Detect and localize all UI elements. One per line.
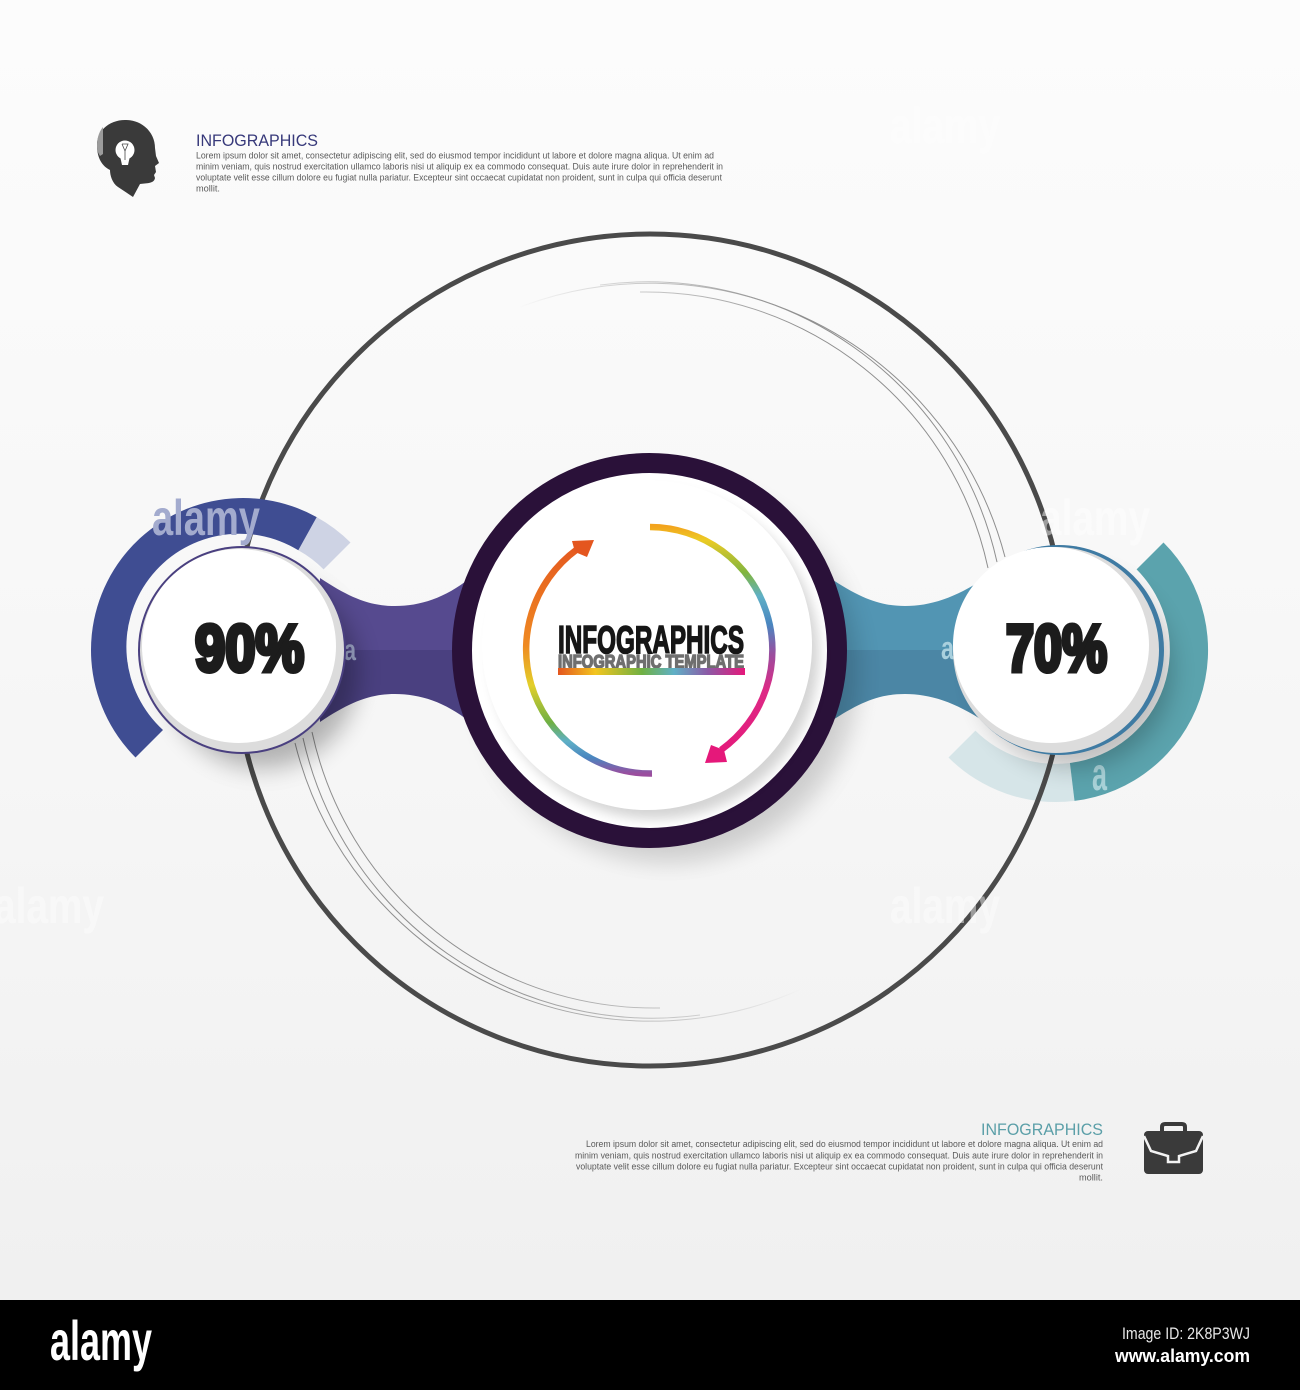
- left circle: [138, 546, 346, 754]
- connector: left: a: [344, 634, 356, 667]
- rainbow arrow: right side: [650, 527, 772, 763]
- top body: voluptate velit esse cillum dolore eu fugiat nulla pariatur. Excepteur sint occaecat cupidatat non proident, sunt in culpa qui officia deserunt: [196, 172, 722, 182]
- watermarks: alamy: [1040, 490, 1150, 546]
- footer logo: alamy: [50, 1309, 152, 1372]
- thin arcs upper right: [510, 282, 1005, 568]
- center circle shadow: [478, 482, 858, 862]
- connector: right: a: [941, 630, 954, 666]
- top body: minim veniam, quis nostrud exercitation ullamco laboris nisi ut aliquip ex ea commodo consequat. Duis aute irure dolor in reprehenderit in: [196, 162, 723, 172]
- connector: right: [830, 578, 985, 722]
- watermark on arc: alamy: [152, 490, 260, 546]
- connector: left: [320, 578, 470, 722]
- top heading: INFOGRAPHICS: [196, 131, 318, 150]
- top body: mollit.: [196, 184, 220, 194]
- rainbow arrow: left side: [526, 540, 652, 774]
- top text block: [196, 131, 723, 194]
- left progress arc: [91, 490, 350, 758]
- top body: [196, 150, 723, 194]
- center title: INFOGRAPHICS: [558, 619, 744, 662]
- left circle shadow: [166, 576, 358, 768]
- bottom body: Lorem ipsum dolor sit amet, consectetur adipiscing elit, sed do eiusmod tempor incididunt ut labore et dolore magna aliqua. Ut enim ad: [586, 1139, 1103, 1149]
- footer url: www.alamy.com: [1114, 1346, 1250, 1366]
- large outer ring: [234, 234, 1066, 1066]
- icon: head with light bulb: [97, 120, 159, 197]
- right circle shadow: [976, 572, 1172, 768]
- watermarks: [0, 98, 1150, 934]
- bottom body: minim veniam, quis nostrud exercitation ullamco laboris nisi ut aliquip ex ea commodo consequat. Duis aute irure dolor in reprehenderit in: [575, 1150, 1103, 1160]
- right progress arc: [948, 542, 1208, 802]
- bottom text block: [575, 1120, 1103, 1182]
- footer image id: Image ID: 2K8P3WJ: [1122, 1324, 1250, 1343]
- center subtitle: INFOGRAPHIC TEMPLATE: [558, 652, 744, 672]
- bottom body: mollit.: [1079, 1172, 1103, 1182]
- rainbow bar: [558, 668, 745, 675]
- value: 70%: 70%: [1006, 611, 1107, 685]
- watermarks: alamy: [890, 878, 1000, 934]
- thin arcs lower left: [295, 732, 820, 1021]
- right circle: [953, 545, 1164, 755]
- top body: Lorem ipsum dolor sit amet, consectetur adipiscing elit, sed do eiusmod tempor incididunt ut labore et dolore magna aliqua. Ut enim ad: [196, 150, 714, 160]
- center circle: [462, 463, 837, 838]
- right progress arc: a: [1092, 748, 1107, 800]
- icon: briefcase: [1144, 1124, 1203, 1174]
- center title: [558, 619, 745, 675]
- watermarks: alamy: [890, 98, 1000, 154]
- footer bar: [0, 1300, 1300, 1390]
- inner plate shadow: [491, 491, 819, 819]
- value: 90%: 90%: [195, 611, 304, 685]
- bottom heading: INFOGRAPHICS: [981, 1120, 1103, 1139]
- bottom body: voluptate velit esse cillum dolore eu fugiat nulla pariatur. Excepteur sint occaecat cupidatat non proident, sunt in culpa qui officia deserunt: [576, 1162, 1103, 1172]
- bottom body: [575, 1139, 1103, 1182]
